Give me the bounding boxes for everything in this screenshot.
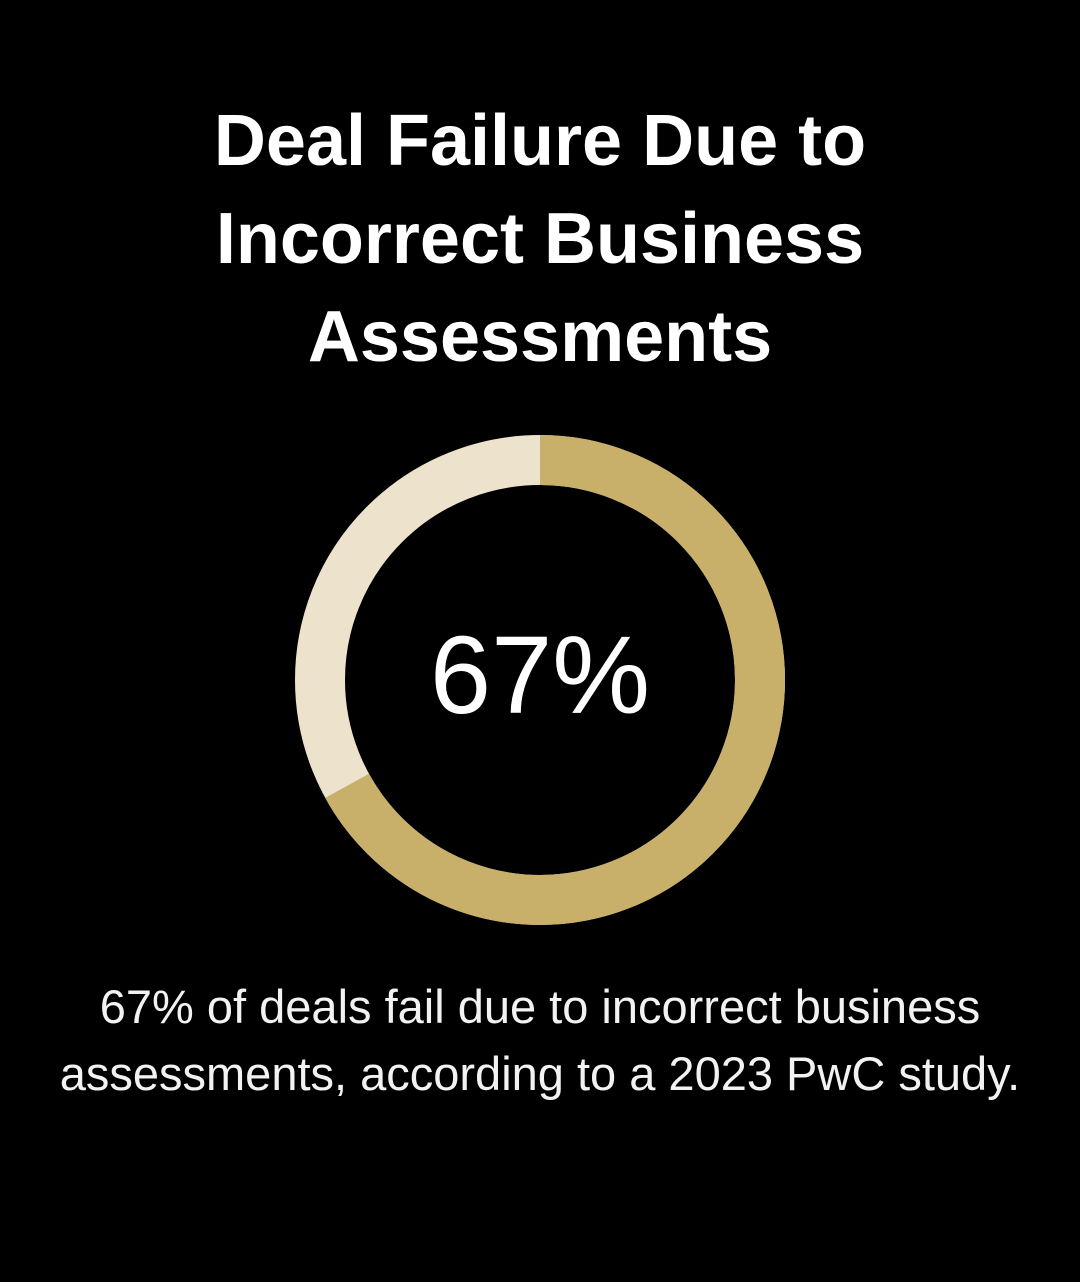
gold arc 67% <box>320 460 760 900</box>
title <box>214 101 866 377</box>
center value: 67% <box>430 614 650 737</box>
caption <box>60 980 1020 1100</box>
title: Deal Failure Due to <box>214 101 866 181</box>
title: Incorrect Business <box>216 199 864 279</box>
caption: assessments, according to a 2023 PwC study. <box>60 1047 1020 1100</box>
caption: 67% of deals fail due to incorrect business <box>100 980 980 1033</box>
remaining arc <box>320 460 760 900</box>
donut chart <box>295 435 785 925</box>
title: Assessments <box>308 297 772 377</box>
